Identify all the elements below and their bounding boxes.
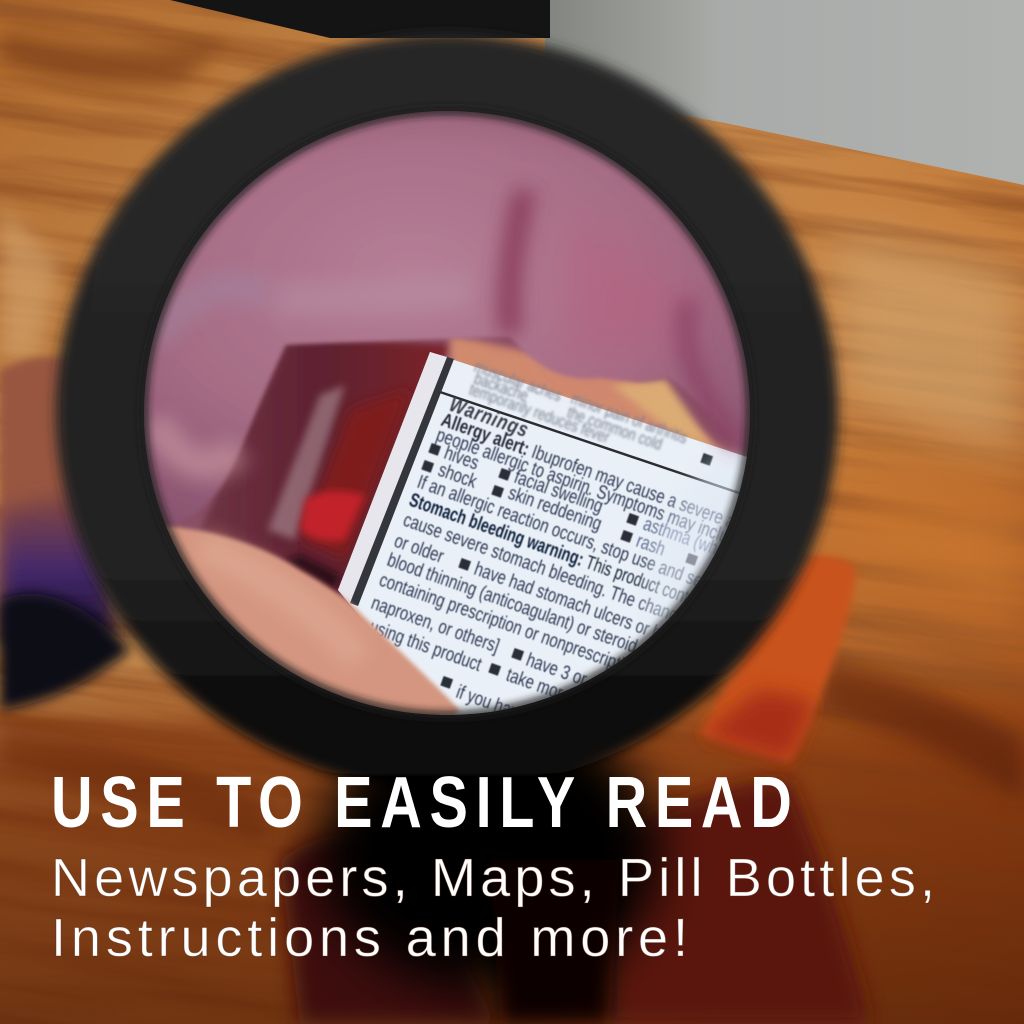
medicine label: minor pain of arthritis xyxy=(569,389,690,448)
label heading: Warnings xyxy=(446,393,532,443)
upper thumb xyxy=(130,105,760,525)
headline: USE TO EASILY READ xyxy=(51,762,792,842)
bottle seen through lens xyxy=(200,335,450,600)
label warning text: rash xyxy=(634,529,669,560)
darkened lower area xyxy=(0,640,1024,1024)
label warning text: have 3 or more xyxy=(524,648,626,703)
background: grey wall xyxy=(545,0,1024,185)
subheading: Instructions and more! xyxy=(51,908,688,968)
label warning text: blood thinning (anticoagulant) or steroid drug xyxy=(385,548,673,669)
lens inner edge shadow xyxy=(144,111,750,715)
label warning text: Allergy alert: Ibuprofen may cause a severe allergic xyxy=(439,408,776,546)
background: dark top edge xyxy=(170,0,550,38)
label warning text: shock xyxy=(436,458,480,492)
label warning text: containing prescription or nonprescription xyxy=(377,568,643,681)
label warning text: take more xyxy=(504,663,574,706)
label warning text: asthma (wheezing) xyxy=(641,512,767,576)
label bullet squares xyxy=(421,443,713,689)
subheading xyxy=(51,848,935,968)
subheading: Newspapers, Maps, Pill Bottles, xyxy=(51,848,935,908)
label warning text: facial swelling xyxy=(512,465,606,517)
label warning text: if you have xyxy=(454,680,529,725)
lens view xyxy=(144,111,750,715)
label warning text: or older xyxy=(392,529,447,567)
orange bottle cap behind the lens xyxy=(700,555,856,762)
label warning text: hives xyxy=(442,441,482,474)
medicine label: the common cold xyxy=(565,403,665,454)
washed-out glare on the far side of the label xyxy=(636,446,747,634)
label warning text: have had stomach ulcers or bleeding xyxy=(472,557,710,660)
label warning text xyxy=(370,413,732,711)
medicine label: muscular aches xyxy=(472,357,565,406)
lower finger xyxy=(150,525,460,720)
label warning text: Stomach bleeding warning: This product contains xyxy=(406,489,716,616)
label warning text: people allergic to aspirin. Symptoms may include: xyxy=(434,423,752,554)
label warning text: If an allergic reaction occurs, stop use and seek medical xyxy=(415,470,773,616)
label warning text: skin reddening xyxy=(506,481,605,535)
magnifier black ring xyxy=(56,34,838,790)
label warning text: using this product xyxy=(367,615,485,676)
label warning text: naproxen, or others] xyxy=(369,591,503,657)
blurred hand and handle below the magnifier xyxy=(280,710,870,1024)
background behind label xyxy=(445,337,732,452)
label warning text: cause severe stomach bleeding. The chance is higher xyxy=(401,508,746,649)
medicine label xyxy=(338,352,747,715)
medicine label: temporarily reduces fever xyxy=(467,380,612,447)
hand at left holding the handle xyxy=(0,357,130,710)
medicine label: backache xyxy=(472,369,531,406)
